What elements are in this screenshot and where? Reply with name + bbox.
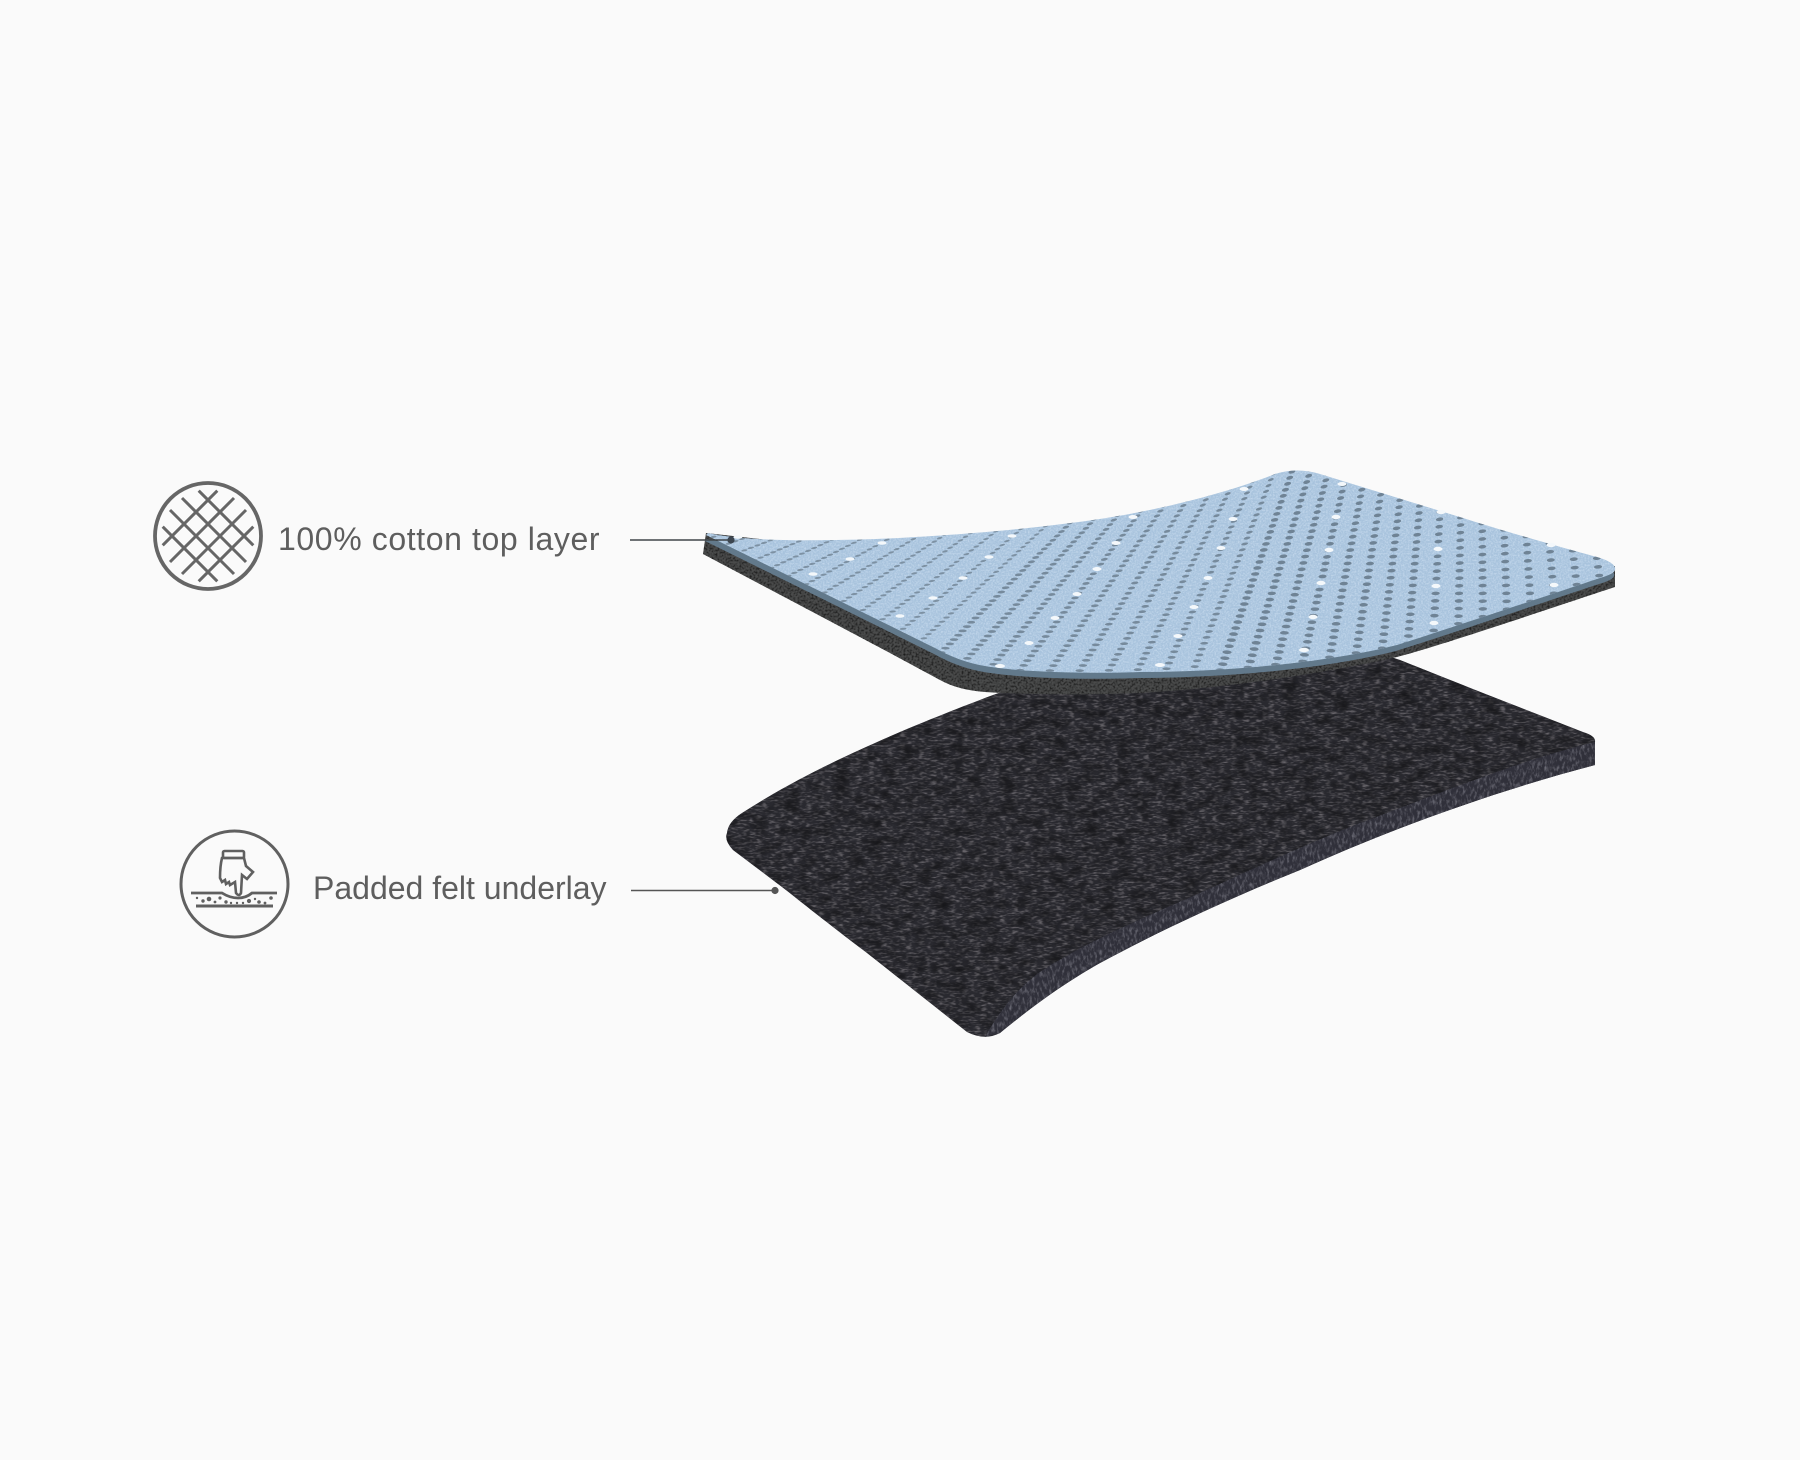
grey dot rows — [710, 470, 1604, 672]
icon: finger pressing padding — [181, 831, 288, 937]
felt side edge — [985, 742, 1595, 1037]
leader line: cotton layer — [630, 536, 735, 544]
foam side edge — [703, 533, 1615, 694]
cotton surface — [706, 470, 1615, 673]
leader line: felt layer — [631, 887, 779, 894]
icon: woven cotton — [155, 483, 261, 589]
felt top surface — [726, 645, 1595, 1037]
panel: padded felt underlay layer — [726, 645, 1595, 1037]
label: felt layer: Padded felt underlay — [313, 870, 607, 906]
white dots — [734, 482, 1558, 668]
blue edge band — [705, 476, 1614, 679]
panel: cotton top layer — [703, 470, 1616, 694]
label: cotton layer: 100% cotton top layer — [278, 521, 600, 557]
